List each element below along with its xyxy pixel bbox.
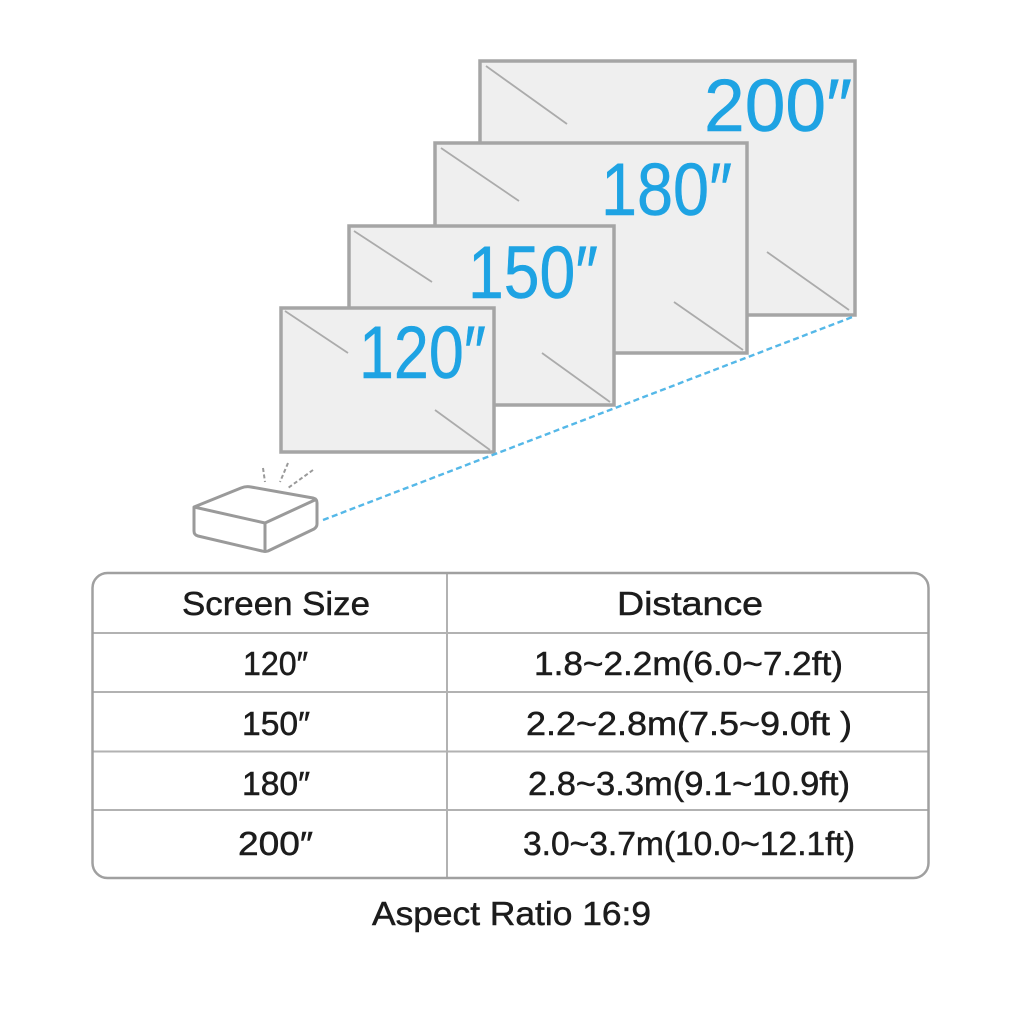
row: 120 inch: 1.8~2.2m(6.0~7.2ft) — [534, 645, 843, 682]
icon: projector — [194, 463, 317, 552]
row: 180 inch: 180″ — [242, 765, 310, 802]
screen: 150 inch — [349, 226, 614, 405]
row: 200 inch: 3.0~3.7m(10.0~12.1ft) — [523, 825, 855, 862]
screen: 150 inch: 150″ — [468, 231, 598, 314]
row: 180 inch — [242, 765, 850, 802]
dashed projection line — [323, 316, 855, 520]
header: distance: Distance — [617, 585, 763, 622]
table grid — [92, 573, 928, 878]
screen: 200 inch — [480, 61, 855, 315]
row: 150 inch: 2.2~2.8m(7.5~9.0ft ) — [526, 705, 852, 742]
row: 200 inch — [238, 825, 855, 862]
caption: aspect ratio: Aspect Ratio 16:9 — [372, 895, 651, 932]
row: 120 inch — [243, 645, 843, 682]
row: 200 inch: 200″ — [238, 825, 313, 862]
row: 150 inch — [242, 705, 852, 742]
row: 150 inch: 150″ — [242, 705, 310, 742]
row: 180 inch: 2.8~3.3m(9.1~10.9ft) — [528, 765, 850, 802]
screen: 120 inch — [281, 308, 494, 452]
screen: 180 inch — [435, 143, 747, 353]
header: screen size: Screen Size — [182, 585, 370, 622]
screen: 120 inch: 120″ — [359, 311, 486, 394]
row: 120 inch: 120″ — [243, 645, 308, 682]
screen: 180 inch: 180″ — [601, 148, 732, 231]
projection diagram — [194, 61, 855, 552]
distance table — [92, 573, 928, 878]
screen: 200 inch: 200″ — [704, 64, 852, 147]
